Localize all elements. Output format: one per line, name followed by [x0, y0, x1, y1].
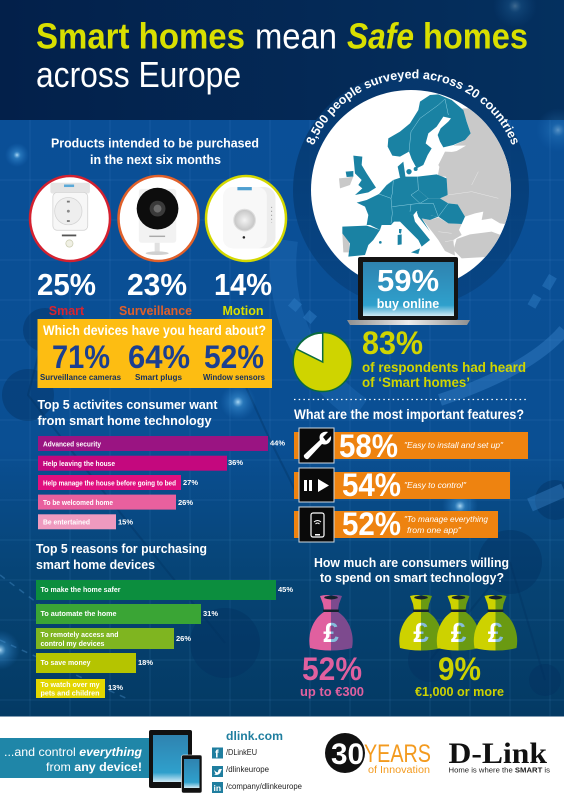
bar chart: top 5 activities: Be entertained [43, 518, 90, 526]
arc text: people surveyed: 8,500 people surveyed across 20 countries [306, 69, 518, 144]
stat: surveillance cameras: cameras [130, 318, 180, 332]
stat: surveillance cameras [119, 267, 192, 332]
stat: 1000 or more: €1,000 or more [415, 685, 504, 699]
icon: green money bag 1 [399, 595, 443, 650]
bar chart: top 5 activities: 36% [228, 458, 243, 467]
panel: devices heard about: Which devices have you heard about? [43, 323, 266, 338]
social: linkedin [212, 782, 303, 793]
social: twitter [212, 765, 270, 777]
social: twitter: /dlinkeurope [226, 765, 270, 774]
stat: 1000 or more: 9% [438, 651, 481, 687]
stat: heard of smart homes: of respondents had heard [362, 360, 526, 375]
feature: one app: "To manage everything [404, 514, 488, 524]
bar chart: top 5 reasons: pets and children [40, 688, 100, 698]
laptop: buy online [347, 257, 470, 325]
feature: easy to control [294, 467, 510, 503]
heading: willing to spend: to spend on smart technology? [320, 570, 504, 585]
bar chart: top 5 reasons: 26% [176, 634, 191, 643]
feature: easy to install: 58% [339, 428, 398, 464]
teal banner: ...and control everything [4, 745, 143, 759]
stat: smart plugs heard: Smart plugs [135, 373, 183, 382]
stat: heard of smart homes [362, 325, 526, 390]
panel: devices heard about [38, 319, 272, 388]
product: motion detector [206, 176, 286, 261]
bar chart: top 5 reasons: To save money [40, 658, 91, 667]
heading: products intended: in the next six months [90, 152, 221, 167]
social: facebook [212, 748, 257, 760]
heading: willing to spend: How much are consumers willing [314, 555, 509, 570]
stat: motion detectors: Motion [223, 304, 263, 318]
stat: up to 300: up to €300 [300, 685, 364, 699]
heading: top 5 activities: Top 5 activites consumer want [38, 397, 218, 412]
social: facebook: /DLinkEU [226, 748, 257, 757]
bar chart: top 5 reasons: 45% [278, 585, 293, 594]
bar chart: top 5 reasons: To watch over my [40, 680, 100, 689]
logo: 30 years: of Innovation [368, 765, 430, 776]
heading: top 5 activities [38, 397, 218, 428]
social: linkedin: in [214, 783, 221, 793]
bar chart: top 5 activities: Help leaving the house [43, 459, 115, 468]
title: across Europe [36, 54, 241, 95]
heading: top 5 reasons: Top 5 reasons for purchasing [36, 541, 207, 556]
heading: most important features: What are the most important features? [294, 407, 524, 422]
title: Safe [347, 16, 414, 56]
footer [0, 716, 564, 800]
teal banner [0, 738, 150, 778]
heading: willing to spend [314, 555, 509, 585]
logo: 30 years: 30 [331, 738, 364, 771]
icon: tablet and phone [149, 730, 202, 793]
teal banner: from any device! [46, 760, 142, 774]
website: dlink.com [226, 731, 283, 743]
stat: surveillance cameras: Surveillance [119, 304, 192, 318]
icon: green money bag 2 [437, 595, 480, 650]
stat: smart plugs: 25% [37, 267, 96, 302]
title: homes [423, 16, 528, 56]
central and southern europe [339, 152, 525, 258]
stat: surveillance cameras heard: 71% [52, 339, 110, 375]
feature: one app: 52% [342, 506, 401, 542]
title [36, 16, 528, 95]
feature: easy to control: "Easy to control" [404, 480, 467, 490]
bar chart: top 5 activities: 15% [118, 518, 133, 526]
bar chart: top 5 activities: 44% [270, 438, 285, 448]
stat: 1000 or more [415, 651, 504, 699]
heading: top 5 reasons [36, 541, 207, 572]
map: surveyed countries [293, 69, 529, 298]
europe map shapes [339, 94, 525, 258]
stat: motion detectors [214, 267, 272, 332]
stat: smart plugs: Smart [49, 304, 85, 318]
product: smart plug [30, 176, 110, 261]
feature: one app [294, 506, 498, 542]
icon: pause play [304, 479, 329, 492]
stat: heard of smart homes: 83% [362, 325, 423, 361]
bar chart: top 5 reasons: 13% [108, 683, 123, 692]
bar chart: top 5 activities: Help manage the house before going to bed [43, 478, 176, 487]
logo: 30 years: YEARS [364, 740, 431, 768]
heading: top 5 activities: from smart home technology [38, 413, 212, 428]
icon: tablet [311, 513, 324, 537]
laptop: buy online: 59% [377, 263, 439, 298]
social: linkedin: /company/dlinkeurope [226, 782, 303, 791]
bar chart: top 5 activities: To be welcomed home [43, 498, 113, 507]
social: facebook: f [215, 748, 219, 760]
icon: wrench [304, 432, 331, 459]
bar chart: top 5 activities: Advanced security [43, 439, 102, 448]
title: mean [255, 16, 337, 56]
icon: pink money bag [309, 595, 353, 650]
stat: smart plugs: plugs [50, 318, 83, 332]
bar chart: top 5 reasons: 18% [138, 658, 153, 667]
stat: smart plugs heard: 64% [128, 339, 190, 375]
feature: easy to install: "Easy to install and set up" [404, 440, 504, 450]
stat: smart plugs [37, 267, 96, 332]
bar chart: top 5 activities: 26% [178, 498, 193, 507]
stat: window sensors heard: Window sensors [203, 373, 266, 382]
icon: green money bag 3: £ [488, 617, 504, 648]
northern europe [388, 94, 522, 177]
icon: green money bag 1: £ [413, 617, 429, 648]
stat: window sensors heard: 52% [204, 339, 264, 375]
bar chart: top 5 reasons [36, 580, 293, 698]
heading: products intended [51, 136, 259, 167]
stat: heard of smart homes: of ‘Smart homes’ [362, 375, 470, 390]
logo: d-link: D-Link [448, 737, 547, 770]
product: surveillance camera [118, 176, 198, 261]
feature: easy to install [294, 428, 528, 464]
camera illustration [137, 188, 178, 255]
bar chart: top 5 reasons: To remotely access and [40, 630, 119, 639]
bar chart: top 5 activities [38, 436, 285, 529]
bar chart: top 5 reasons: To automate the home [40, 609, 116, 618]
laptop: buy online: buy online [377, 297, 439, 311]
bar chart: top 5 reasons: To make the home safer [40, 585, 121, 594]
icon: green money bag 3 [474, 595, 517, 650]
stat: motion detectors: detectors [215, 318, 270, 332]
stat: up to 300: 52% [302, 651, 362, 687]
stat: surveillance cameras: 23% [127, 267, 187, 302]
logo: d-link: Home is where the SMART is [448, 766, 550, 774]
icon: green money bag 2: £ [451, 617, 467, 648]
icon: pink money bag: £ [323, 617, 339, 648]
feature: easy to control: 54% [342, 467, 401, 503]
motion detector illustration [223, 187, 276, 248]
pie chart: 83 percent [293, 332, 352, 392]
plug device illustration [50, 183, 90, 247]
bar chart: top 5 reasons: 31% [203, 609, 218, 618]
stat: surveillance cameras heard: Surveillance cameras [40, 373, 122, 382]
bar chart: top 5 reasons: control my devices [40, 639, 104, 648]
stat: surveillance cameras heard [40, 339, 122, 382]
stat: motion detectors: 14% [214, 267, 272, 302]
heading: products intended: Products intended to be purchased [51, 136, 259, 150]
title: Smart homes [36, 16, 245, 56]
feature: one app: from one app" [407, 525, 462, 535]
logo: 30 years [325, 733, 431, 776]
heading: top 5 reasons: smart home devices [36, 557, 155, 572]
bar chart: top 5 activities: 27% [183, 478, 198, 487]
